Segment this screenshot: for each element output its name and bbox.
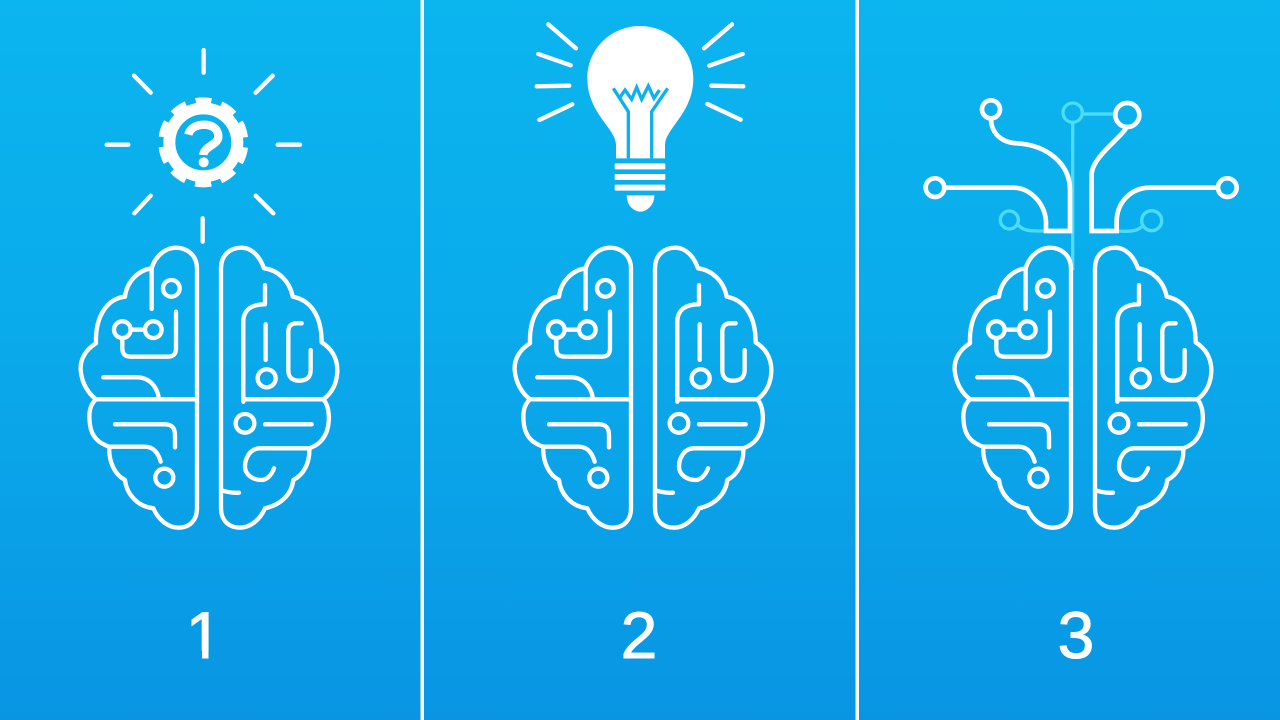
- icon: cyan circuit traces: [1000, 103, 1162, 270]
- panel 2: light bulb and brain: [515, 24, 771, 672]
- brain 1: [81, 248, 337, 528]
- icon: light bulb with rays: [537, 24, 743, 212]
- panel 3: circuit and brain: [926, 100, 1237, 672]
- panel divider: 2 and 3: [856, 0, 859, 720]
- panel divider: 1 and 2: [420, 0, 424, 720]
- brain 2: [515, 248, 771, 528]
- icon: gear with question mark and rays: [107, 50, 300, 242]
- number 3: 3: [1058, 598, 1094, 672]
- number 1: [191, 612, 209, 658]
- icon: white circuit traces: [926, 100, 1237, 231]
- number 2: 2: [621, 598, 657, 672]
- brain 3: [955, 248, 1211, 528]
- number 1: 1: [186, 598, 222, 672]
- panel 1: question gear and brain: [81, 50, 337, 672]
